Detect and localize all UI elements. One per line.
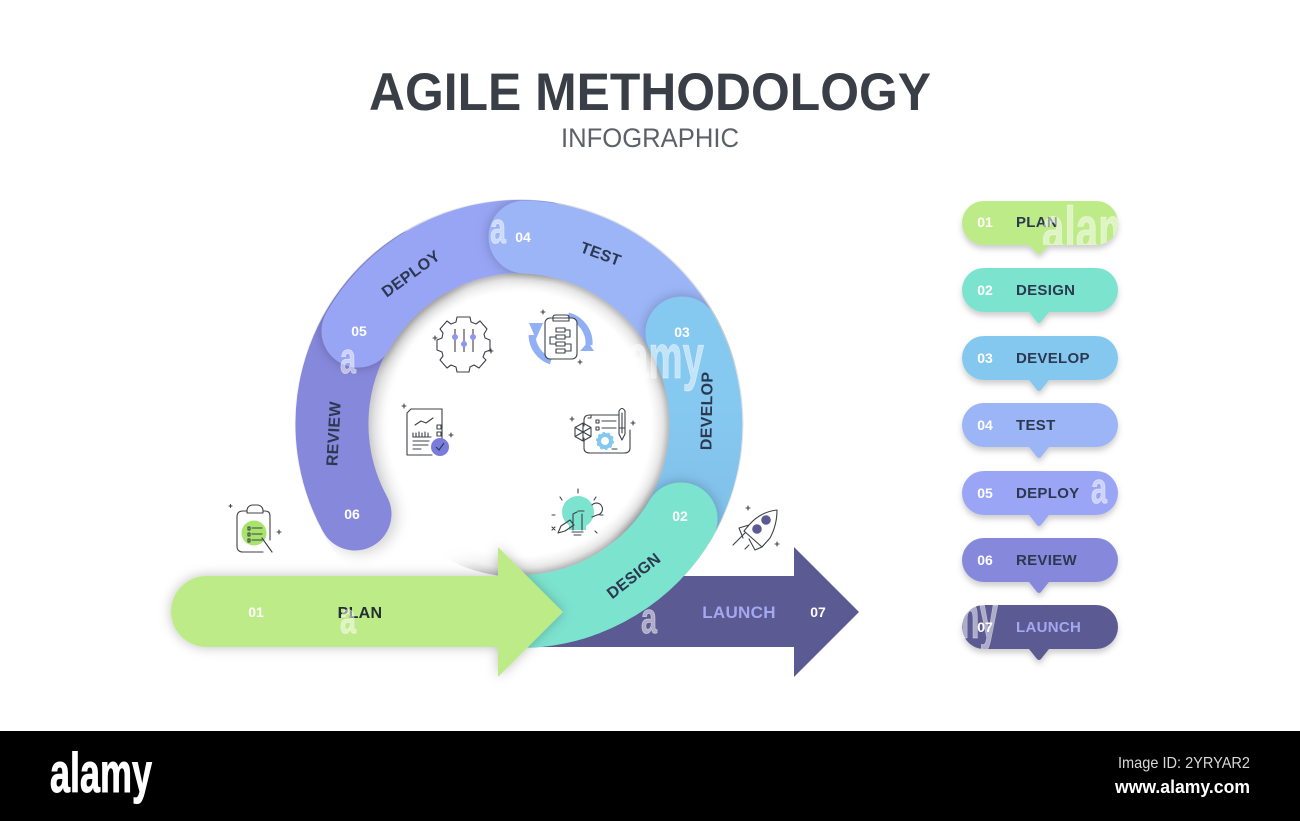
legend item 01 plan: 01: [977, 214, 993, 230]
icon: blueprint with pencil: [570, 408, 635, 453]
inner disc: [330, 271, 672, 602]
number 06: 06: [344, 506, 360, 522]
legend item 03 develop: DEVELOP: [1016, 350, 1090, 367]
legend item 05 deploy: DEPLOY: [1016, 485, 1079, 502]
image id: Image ID: 2YRYAR2: [1118, 755, 1250, 772]
number 02: 02: [672, 508, 688, 524]
watermarks: my: [950, 583, 998, 652]
legend item 03 develop: [962, 336, 1118, 391]
arrow: plan: [171, 547, 563, 677]
legend item 06 review: [962, 538, 1118, 593]
icon: gear with sliders: [433, 317, 493, 372]
segment: test: [525, 237, 695, 362]
legend item 02 design: 02: [977, 282, 993, 298]
label: design: DESIGN: [604, 550, 664, 603]
legend item 05 deploy: 05: [977, 485, 993, 501]
watermarks: a: [641, 594, 657, 643]
watermarks: [340, 195, 1134, 652]
number 03: 03: [674, 324, 690, 340]
watermarks: amy: [627, 323, 704, 392]
legend item 05 deploy: [962, 471, 1118, 526]
subtitle: INFOGRAPHIC: [561, 123, 739, 153]
legend item 07 launch: [962, 605, 1118, 660]
label: plan: PLAN: [338, 605, 382, 622]
label: develop: DEVELOP: [698, 371, 717, 450]
legend item 01 plan: [962, 201, 1118, 254]
icon: rocket: [733, 506, 779, 550]
label: test: TEST: [578, 240, 623, 270]
number 04: 04: [515, 229, 531, 245]
segment: develop: [655, 333, 706, 553]
agile loop diagram: [171, 229, 859, 677]
segment: review: [332, 265, 420, 514]
watermarks: a: [340, 594, 356, 643]
legend item 06 review: REVIEW: [1016, 552, 1078, 569]
legend item 02 design: DESIGN: [1016, 282, 1075, 299]
website: www.alamy.com: [1114, 777, 1250, 797]
legend item 04 test: 04: [977, 417, 993, 433]
label: launch: LAUNCH: [702, 603, 776, 622]
footer bar: [0, 731, 1300, 821]
icon: light bulb with pencil: [552, 489, 603, 535]
legend item 01 plan: PLAN: [1016, 214, 1058, 231]
icon: report with check: [402, 404, 453, 456]
legend item 04 test: [962, 403, 1118, 458]
legend: [962, 201, 1118, 660]
number 05: 05: [351, 323, 367, 339]
label: review: REVIEW: [324, 400, 345, 467]
watermarks: a: [340, 334, 356, 383]
number 07: 07: [810, 604, 826, 620]
legend item 07 launch: LAUNCH: [1016, 619, 1081, 636]
segment: design: [530, 519, 681, 611]
label: deploy: DEPLOY: [379, 248, 444, 301]
legend item 03 develop: 03: [977, 350, 993, 366]
legend item 04 test: TEST: [1016, 417, 1056, 434]
icon: clipboard with magnifier: [229, 504, 281, 552]
watermarks: alam: [1042, 195, 1134, 264]
legend item 02 design: [962, 268, 1118, 323]
footer logo: alamy: [50, 741, 152, 804]
number 01: 01: [248, 604, 264, 620]
icon: clipboard with cycle arrows: [529, 310, 594, 364]
legend item 06 review: 06: [977, 552, 993, 568]
watermarks: a: [490, 204, 506, 253]
legend number 07: 07: [977, 619, 993, 635]
arrow: launch: [525, 547, 859, 677]
segment: deploy: [358, 236, 545, 331]
watermarks: a: [1091, 464, 1107, 513]
title: AGILE METHODOLOGY: [369, 63, 931, 122]
